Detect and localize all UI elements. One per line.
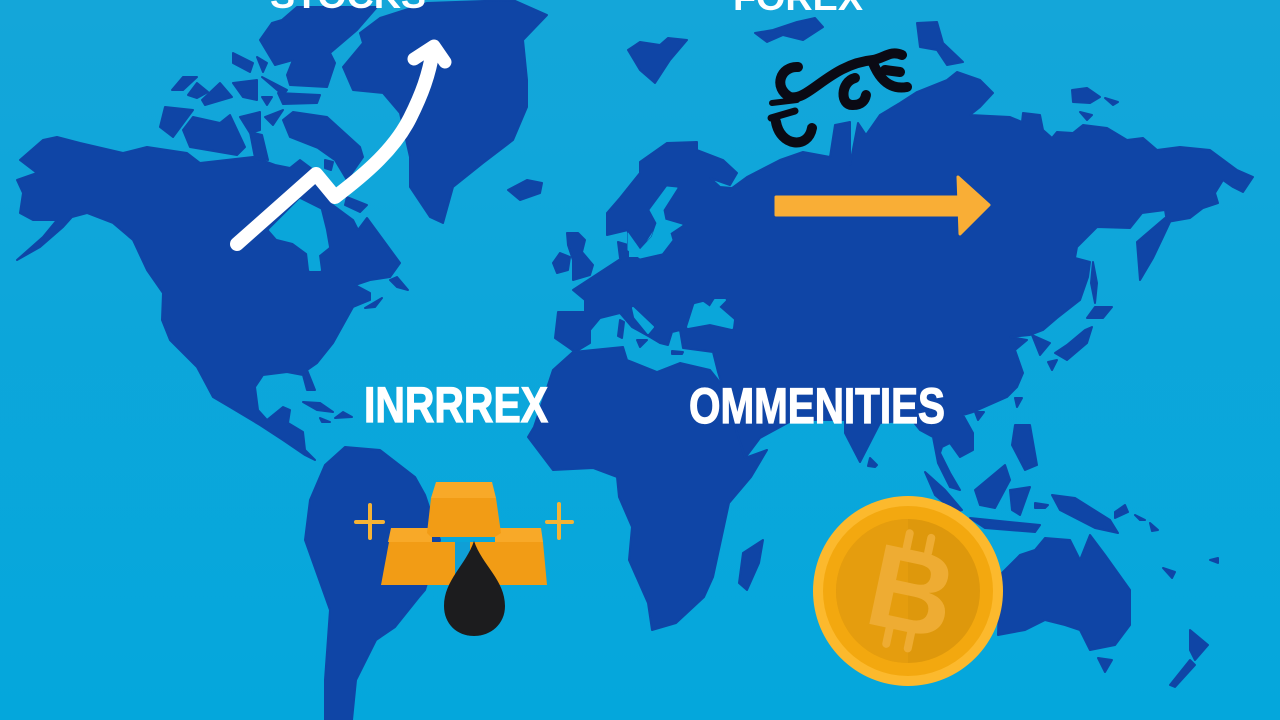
map: arctic islands [160, 7, 377, 212]
map: mediterranean islands [618, 320, 683, 354]
map: japan and sakhalin [1015, 262, 1112, 407]
map: atlantic canada [365, 277, 408, 308]
map: sri lanka and hainan [868, 412, 984, 467]
plus sign right [547, 504, 572, 538]
bitcoin symbol: B [856, 519, 967, 665]
map: caribbean [303, 402, 352, 422]
heading: commodities: OMMENITIES [689, 378, 945, 434]
icon: currency symbols [771, 53, 907, 142]
map: madagascar [739, 540, 763, 590]
map: iceland [508, 180, 542, 200]
map: south america [305, 447, 440, 720]
map: greenland [343, 0, 547, 223]
map: africa [528, 347, 767, 630]
oil drop [444, 541, 505, 636]
gold bar top [427, 482, 501, 537]
map: australia [998, 535, 1130, 650]
gold bar right [470, 528, 547, 585]
icon: commodities gold bars and oil [356, 482, 572, 636]
map: kamchatka [1137, 218, 1170, 280]
plus sign left [356, 505, 383, 538]
map: black sea and adriatic [633, 300, 733, 333]
heading: indices: INRRREX [364, 377, 548, 433]
icon: bitcoin coin [813, 496, 1003, 686]
water sliver [455, 542, 470, 585]
map: south east asia [925, 425, 1128, 533]
gold bar left [381, 528, 455, 585]
icon: rising stock arrow [237, 46, 445, 244]
map: hudson bay [270, 200, 328, 270]
map: eurasia with europe [555, 72, 1253, 490]
map: british isles [553, 233, 593, 280]
map: north america [17, 137, 400, 460]
map: pacific islands and new zealand [1098, 515, 1218, 687]
map: northern islands [628, 18, 1118, 120]
icon: orange forward arrow [776, 177, 989, 234]
map: baltic sea [628, 187, 682, 258]
